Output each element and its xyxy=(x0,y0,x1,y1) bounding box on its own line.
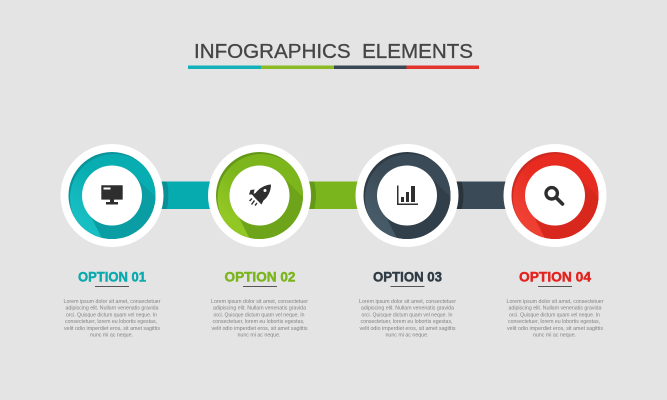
body text: adipiscing elit. Nullam venenatis gravida xyxy=(508,306,602,312)
title underline xyxy=(188,66,479,69)
panel: option 01 text xyxy=(64,270,161,338)
body text: nunc mi ac neque. xyxy=(386,332,429,338)
body text: consectetuer, lorem eu lobortis egestas, xyxy=(360,319,453,325)
body text: adipiscing elit. Nullam venenatis gravida xyxy=(66,306,159,312)
heading: OPTION 04 xyxy=(519,270,591,284)
body text: Lorem ipsum dolor sit amet, consectetuer xyxy=(211,299,308,305)
heading: OPTION 03 xyxy=(373,270,442,284)
body text: velit odio imperdiet eros, sit amet sagittis xyxy=(360,326,456,332)
circle: option 01 xyxy=(60,144,164,247)
body text: orci. Quisque dictum quam vel neque. In xyxy=(66,312,157,318)
circle: option 02 xyxy=(208,144,311,247)
body text: Lorem ipsum dolor sit amet, consectetuer xyxy=(64,299,161,305)
body text: consectetuer, lorem eu lobortis egestas, xyxy=(508,319,600,325)
body text: velit odio imperdiet eros, sit amet sagittis xyxy=(507,326,603,332)
heading: OPTION 01 xyxy=(78,270,146,284)
connector: navy xyxy=(456,182,506,209)
icon: rocket xyxy=(249,184,271,206)
body text: velit odio imperdiet eros, sit amet sagittis xyxy=(212,326,308,332)
body text: consectetuer, lorem eu lobortis egestas, xyxy=(65,319,157,325)
body text: consectetuer, lorem eu lobortis egestas, xyxy=(212,319,305,325)
panel: option 02 text xyxy=(211,270,308,338)
body text: nunc mi ac neque. xyxy=(90,332,133,338)
title: INFOGRAPHICS ELEMENTS xyxy=(194,41,473,63)
connector: green xyxy=(309,182,358,209)
body text xyxy=(506,299,604,338)
body text: velit odio imperdiet eros, sit amet sagittis xyxy=(64,326,160,332)
circle: option 03 xyxy=(356,144,458,247)
body text: orci. Quisque dictum quam vel neque. In xyxy=(214,312,304,318)
icon: magnifier xyxy=(546,188,562,204)
icon: monitor xyxy=(101,185,123,204)
body text: nunc mi ac neque. xyxy=(238,332,281,338)
panel: option 04 text xyxy=(506,270,604,338)
connector: teal xyxy=(162,182,210,209)
body text: Lorem ipsum dolor sit amet, consectetuer xyxy=(506,299,604,305)
body text xyxy=(359,299,456,338)
body text: Lorem ipsum dolor sit amet, consectetuer xyxy=(359,299,456,305)
icon: bar chart xyxy=(397,186,418,205)
body text: orci. Quisque dictum quam vel neque. In xyxy=(509,312,600,318)
body text xyxy=(64,299,161,338)
body text: adipiscing elit. Nullam venenatis gravida xyxy=(213,306,307,312)
panel: option 03 text xyxy=(359,270,456,338)
body text xyxy=(211,299,308,338)
heading: OPTION 02 xyxy=(224,270,296,284)
body text: nunc mi ac neque. xyxy=(533,332,576,338)
body text: orci. Quisque dictum quam vel neque. In xyxy=(362,312,452,318)
body text: adipiscing elit. Nullam venenatis gravida xyxy=(361,306,455,312)
circle: option 04 xyxy=(504,144,606,247)
